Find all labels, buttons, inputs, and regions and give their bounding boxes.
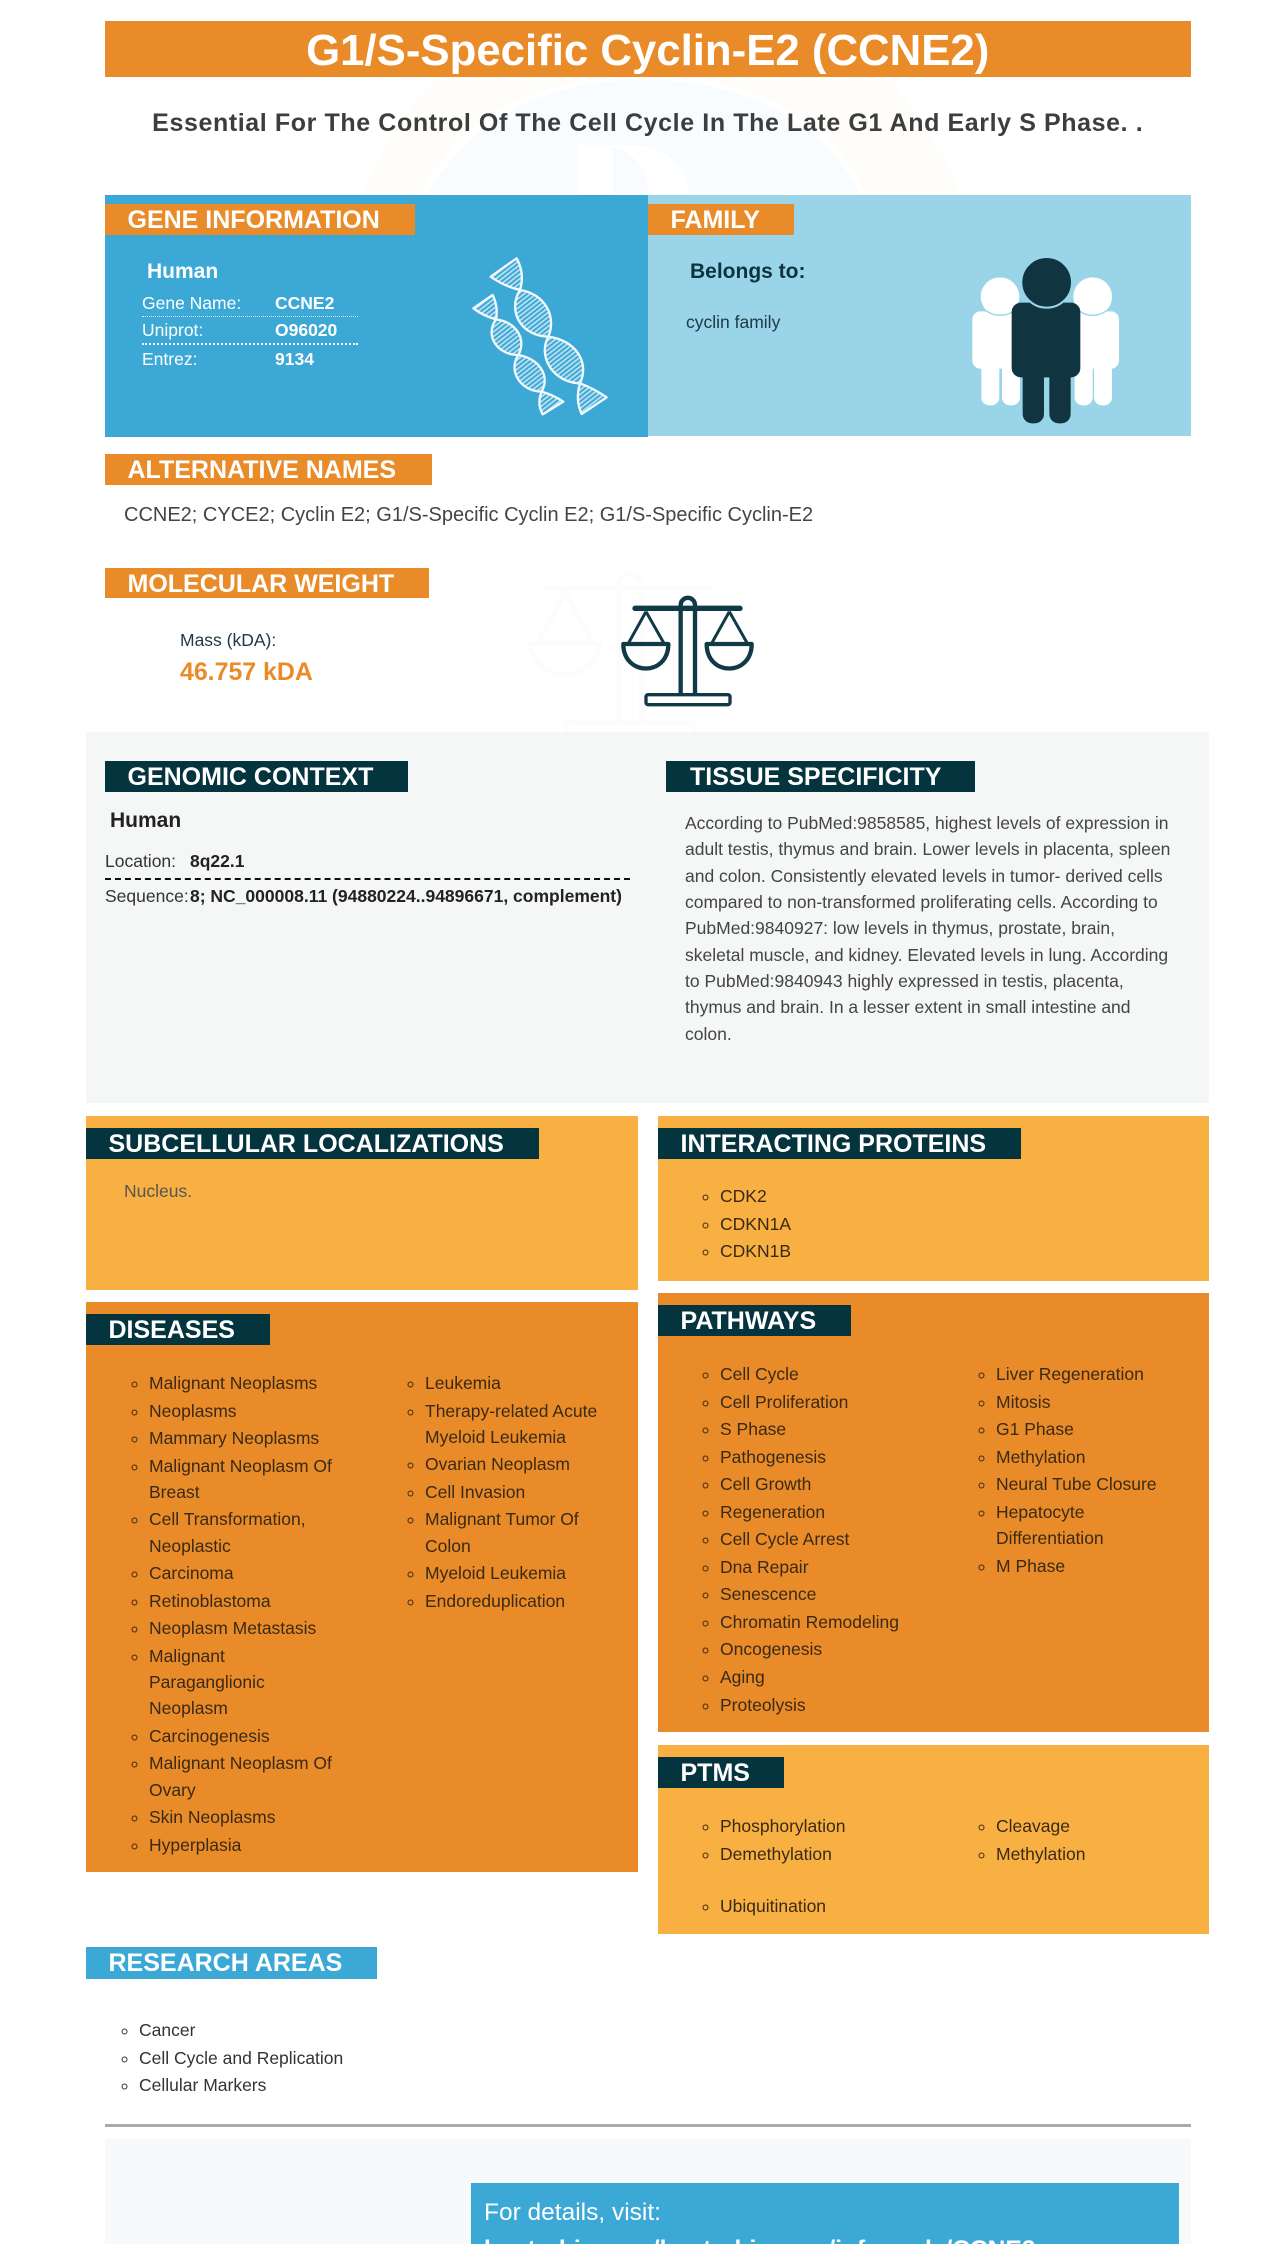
heading: subcellular localizations: SUBCELLULAR LOCALIZATIONS [108, 1130, 504, 1158]
diseases list, first column: Hyperplasia [149, 1835, 241, 1855]
heading: pathways: PATHWAYS [680, 1307, 816, 1335]
mass value: 46.757 kDA [180, 658, 313, 686]
field: gene name: CCNE2 [275, 293, 334, 313]
tissue specificity paragraph [685, 813, 1170, 1044]
family value: cyclin family [686, 312, 780, 332]
diseases list, second column: Myeloid Leukemia [425, 1563, 566, 1583]
location row: 8q22.1 [190, 851, 244, 871]
pathways list, second column: Hepatocyte [996, 1502, 1085, 1522]
heading: gene information: GENE INFORMATION [128, 206, 380, 234]
heading: alternative names: ALTERNATIVE NAMES [128, 456, 396, 484]
sequence row: 8; NC_000008.11 (94880224..94896671, complement) [190, 886, 622, 906]
callout: details link [471, 2183, 1178, 2244]
heading: interacting proteins: INTERACTING PROTEINS [680, 1130, 986, 1158]
diseases list, second column: Leukemia [425, 1373, 501, 1393]
research areas list: Cell Cycle and Replication [139, 2048, 343, 2068]
heading: ptms [658, 1757, 784, 1788]
diseases list, second column: Malignant Tumor Of [425, 1509, 579, 1529]
diseases list, first column: Breast [149, 1482, 200, 1502]
pathways list, first column: Pathogenesis [720, 1447, 826, 1467]
pathways list, first column [702, 1364, 899, 1715]
heading: genomic context: GENOMIC CONTEXT [128, 763, 373, 791]
subtitle: Essential For The Control Of The Cell Cycle In The Late G1 And Early S Phase. . [152, 109, 1143, 137]
localization text: Nucleus. [124, 1181, 192, 1201]
field: entrez: 9134 [275, 349, 314, 369]
panel: interacting proteins [658, 1116, 1209, 1281]
ptms list, first column: Demethylation [720, 1844, 832, 1864]
pathways list, second column: Mitosis [996, 1392, 1050, 1412]
interacting proteins list: CDKN1B [720, 1241, 791, 1261]
panel: diseases [86, 1302, 638, 1872]
ptms list, first column: Ubiquitination [720, 1896, 826, 1916]
diseases list, second column [408, 1373, 597, 1611]
panel: genomic context and tissue specificity [86, 732, 1209, 1103]
title banner [105, 21, 1190, 77]
pathways list, first column: Cell Growth [720, 1474, 811, 1494]
pathways list, first column: Aging [720, 1667, 765, 1687]
diseases list, first column: Ovary [149, 1780, 196, 1800]
diseases list, first column: Malignant Neoplasms [149, 1373, 317, 1393]
tissue specificity paragraph: skeletal muscle, and kidney. Elevated levels in lung. According [685, 945, 1168, 965]
diseases list, second column: Endoreduplication [425, 1591, 565, 1611]
tissue specificity paragraph: colon. [685, 1024, 732, 1044]
pathways list, first column: Chromatin Remodeling [720, 1612, 899, 1632]
interacting proteins list [702, 1186, 791, 1261]
pathways list, first column: Dna Repair [720, 1557, 809, 1577]
callout label: For details, visit: [484, 2199, 661, 2226]
heading: pathways [658, 1305, 851, 1336]
pathways list, first column: Senescence [720, 1584, 816, 1604]
mass label: Mass (kDA): [180, 630, 276, 650]
ptms list, second column: Cleavage [996, 1816, 1070, 1836]
pathways list, first column: Proteolysis [720, 1695, 806, 1715]
heading: ptms: PTMS [680, 1759, 750, 1787]
heading: tissue specificity: TISSUE SPECIFICITY [690, 763, 941, 791]
research areas list: Cancer [139, 2020, 195, 2040]
diseases list, first column: Cell Transformation, [149, 1509, 306, 1529]
alternative names text: CCNE2; CYCE2; Cyclin E2; G1/S-Specific Cyclin E2; G1/S-Specific Cyclin-E2 [124, 504, 813, 526]
ptms list, first column [702, 1816, 846, 1916]
panel: footer [105, 2139, 1190, 2244]
genomic species label: Human [110, 809, 181, 832]
icon: balance scale [621, 596, 754, 706]
diseases list, second column: Ovarian Neoplasm [425, 1454, 570, 1474]
field: entrez [142, 349, 314, 369]
diseases list, first column: Malignant Neoplasm Of [149, 1456, 332, 1476]
pathways list, first column: Cell Proliferation [720, 1392, 848, 1412]
diseases list, second column: Cell Invasion [425, 1482, 525, 1502]
heading: diseases: DISEASES [108, 1316, 235, 1344]
pathways list, first column: Cell Cycle Arrest [720, 1529, 849, 1549]
field: uniprot: O96020 [275, 320, 337, 340]
pathways list, second column: Liver Regeneration [996, 1364, 1144, 1384]
interacting proteins list: CDK2 [720, 1186, 767, 1206]
diseases list, first column: Malignant [149, 1646, 225, 1666]
pathways list, second column: Methylation [996, 1447, 1086, 1467]
interacting proteins list: CDKN1A [720, 1214, 791, 1234]
pathways list, second column: Differentiation [996, 1528, 1104, 1548]
pathways list, first column: Cell Cycle [720, 1364, 799, 1384]
diseases list, second column: Colon [425, 1536, 471, 1556]
diseases list, first column: Mammary Neoplasms [149, 1428, 319, 1448]
heading: family [648, 204, 794, 235]
panel: gene information [105, 195, 648, 437]
research areas list: Cellular Markers [139, 2075, 266, 2095]
research areas list [122, 2020, 343, 2095]
tissue specificity paragraph: thymus and brain. In a lesser extent in small intestine and [685, 997, 1131, 1017]
diseases list, first column: Neoplastic [149, 1536, 231, 1556]
tissue specificity paragraph: adult testis, thymus and brain. Lower levels in placenta, spleen [685, 839, 1170, 859]
panel: ptms [658, 1745, 1209, 1934]
tissue specificity paragraph: compared to non-transformed proliferating cells. According to [685, 892, 1158, 912]
icon: people group [972, 258, 1119, 424]
background watermark: scale [520, 570, 780, 735]
diseases list, first column: Neoplasm Metastasis [149, 1618, 316, 1638]
field: uniprot: Uniprot: [142, 320, 203, 340]
tissue specificity paragraph: PubMed:9840927: low levels in thymus, prostate, brain, [685, 918, 1115, 938]
diseases list, first column: Retinoblastoma [149, 1591, 271, 1611]
diseases list, first column: Carcinogenesis [149, 1726, 270, 1746]
diseases list, first column: Malignant Neoplasm Of [149, 1753, 332, 1773]
location row: Location: [105, 851, 176, 871]
heading: molecular weight: MOLECULAR WEIGHT [128, 570, 394, 598]
panel: pathways [658, 1293, 1209, 1732]
belongs to label: Belongs to: [690, 260, 806, 283]
diseases list, first column: Neoplasm [149, 1698, 228, 1718]
species label: Human [147, 260, 218, 283]
sequence row: Sequence: [105, 886, 189, 906]
ptms list, second column: Methylation [996, 1844, 1086, 1864]
title banner: G1/S-Specific Cyclin-E2 (CCNE2) [306, 26, 989, 75]
heading: diseases [86, 1314, 270, 1345]
pathways list, second column: G1 Phase [996, 1419, 1074, 1439]
heading: research areas: RESEARCH AREAS [108, 1949, 342, 1977]
ptms list, first column: Phosphorylation [720, 1816, 846, 1836]
diseases list, first column: Paraganglionic [149, 1672, 265, 1692]
field: gene name [142, 290, 358, 317]
pathways list, second column: M Phase [996, 1556, 1065, 1576]
pathways list, first column: Regeneration [720, 1502, 825, 1522]
tissue specificity paragraph: to PubMed:9840943 highly expressed in testis, placenta, [685, 971, 1124, 991]
tissue specificity paragraph: and colon. Consistently elevated levels in tumor- derived cells [685, 866, 1163, 886]
diseases list, first column [132, 1373, 332, 1855]
pathways list, first column: S Phase [720, 1419, 786, 1439]
field: uniprot [142, 317, 358, 345]
heading: family: FAMILY [670, 206, 760, 234]
field: entrez: Entrez: [142, 349, 197, 369]
ptms list, second column [978, 1816, 1086, 1864]
diseases list, second column: Myeloid Leukemia [425, 1427, 566, 1447]
tissue specificity paragraph: According to PubMed:9858585, highest levels of expression in [685, 813, 1168, 833]
panel: subcellular localizations [86, 1116, 638, 1290]
diseases list, first column: Neoplasms [149, 1401, 237, 1421]
diseases list, first column: Carcinoma [149, 1563, 234, 1583]
pathways list, second column [978, 1364, 1156, 1576]
field: gene name: Gene Name: [142, 293, 241, 313]
diseases list, second column: Therapy-related Acute [425, 1401, 597, 1421]
pathways list, second column: Neural Tube Closure [996, 1474, 1156, 1494]
location row [105, 848, 630, 880]
diseases list, first column: Skin Neoplasms [149, 1807, 275, 1827]
panel: family [648, 195, 1190, 436]
icon: dna helices [472, 257, 608, 416]
background watermark: arcs [340, 70, 980, 200]
pathways list, first column: Oncogenesis [720, 1639, 822, 1659]
